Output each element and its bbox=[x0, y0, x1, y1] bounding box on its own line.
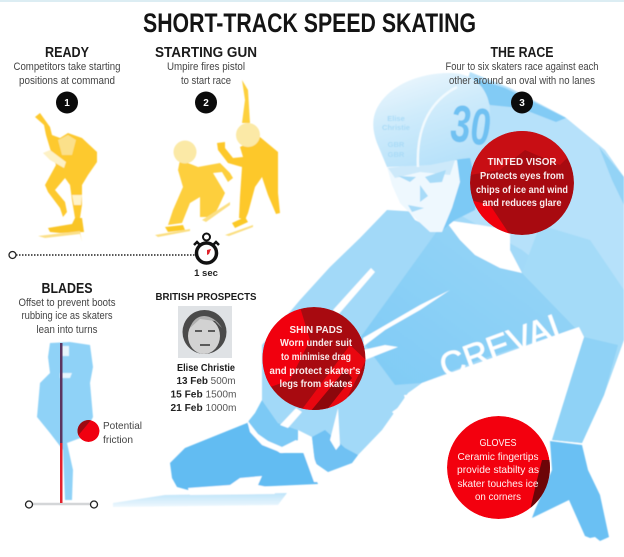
callout disc: shin pads bbox=[262, 307, 366, 412]
skater: helmet seam bbox=[418, 87, 457, 167]
icon: stopwatch bbox=[194, 234, 219, 263]
text: starting gun description: Umpire fires pistol bbox=[167, 61, 245, 73]
heading: starting gun: STARTING GUN bbox=[155, 45, 257, 61]
skater: helmet number: 30 bbox=[447, 95, 495, 158]
skater: glove bbox=[532, 441, 609, 541]
text: starting gun description bbox=[167, 61, 245, 87]
callout text: shin pads: to minimise drag bbox=[281, 351, 351, 363]
skater: helmet bbox=[373, 73, 490, 167]
text: blades description bbox=[18, 297, 116, 336]
skater: back stripe bbox=[473, 78, 566, 122]
skater: face bbox=[387, 160, 460, 232]
text: ready description: positions at command bbox=[19, 75, 115, 87]
text: starting gun description: to start race bbox=[181, 75, 231, 87]
callout disc: gloves bbox=[447, 416, 555, 519]
skater: body base bbox=[262, 210, 584, 472]
skater: helmet name: GBR bbox=[388, 140, 405, 149]
number badge 2: 2 bbox=[203, 98, 209, 109]
callout: gloves bbox=[447, 416, 555, 519]
skater: belly cutaway bbox=[412, 327, 584, 410]
callout text: gloves: provide stabilty as bbox=[457, 464, 539, 476]
skater: helmet name: GBR bbox=[388, 150, 405, 159]
callout text: gloves: Ceramic fingertips bbox=[458, 451, 538, 463]
timeline start marker bbox=[9, 252, 16, 258]
skater: helmet name: Elise bbox=[387, 114, 405, 123]
skater: neck shadow bbox=[440, 158, 478, 232]
label: potential friction: friction bbox=[103, 434, 133, 446]
heading: blades: BLADES bbox=[42, 281, 93, 297]
number badge 3: 3 bbox=[519, 98, 525, 109]
step 1: ready bbox=[14, 45, 120, 242]
blade base marker left bbox=[26, 501, 32, 508]
text: the race description: Four to six skaters race against each bbox=[446, 61, 598, 73]
skater: boot bbox=[170, 423, 318, 490]
skater: suit brand lettering: CREVAL bbox=[434, 304, 575, 387]
panel: blades bbox=[18, 281, 142, 508]
skater: visor and brow shading bbox=[388, 160, 455, 178]
icon: yellow upright skater bbox=[217, 80, 280, 236]
callout text: shin pads: SHIN PADS bbox=[290, 324, 342, 336]
callout text: gloves: on corners bbox=[475, 491, 521, 503]
text: ready description: Competitors take starting bbox=[14, 61, 120, 73]
number badge 2 bbox=[195, 92, 217, 114]
blade base line bbox=[29, 503, 94, 505]
callout text: gloves: skater touches ice bbox=[458, 478, 539, 490]
skater: white suit stripes bbox=[247, 210, 522, 482]
heading: the race: THE RACE bbox=[490, 45, 554, 61]
callout text: visor: and reduces glare bbox=[482, 197, 562, 209]
number badge 1 bbox=[56, 92, 78, 114]
skater: ice spray under boot bbox=[113, 493, 287, 507]
timeline with stopwatch bbox=[9, 234, 219, 279]
callout text: shin pads: and protect skater's bbox=[270, 365, 361, 377]
icon: skate seen from behind bbox=[37, 342, 93, 500]
skater: chest bbox=[360, 220, 584, 385]
friction marker bbox=[77, 420, 100, 442]
athlete event dates: 21 Feb 1000m bbox=[170, 402, 237, 414]
skater: back and far shoulder bbox=[440, 72, 624, 337]
step 3: the race bbox=[446, 45, 598, 114]
callout text: shin pads bbox=[270, 324, 361, 390]
athlete event dates: 15 Feb 1500m bbox=[170, 388, 237, 400]
callout text: visor: chips of ice and wind bbox=[476, 184, 568, 196]
label: one second: 1 sec bbox=[194, 268, 218, 279]
blade base marker right bbox=[90, 501, 98, 508]
skater: far-side shoulder stripe bbox=[599, 147, 624, 205]
text: blades description: Offset to prevent boots bbox=[18, 297, 116, 309]
heading: british prospects: BRITISH PROSPECTS bbox=[156, 291, 256, 303]
athlete name: Elise Christie bbox=[177, 362, 235, 374]
heading: ready: READY bbox=[45, 45, 89, 61]
step 2: starting gun bbox=[155, 45, 280, 237]
skater: boot strap and spray bbox=[188, 476, 275, 495]
skater: helmet name: Christie bbox=[382, 123, 410, 132]
label: potential friction: Potential bbox=[103, 420, 142, 432]
large skater illustration bbox=[113, 72, 624, 541]
callout disc: visor bbox=[470, 128, 575, 235]
callout text: gloves: GLOVES bbox=[480, 437, 516, 449]
callout text: shin pads: legs from skates bbox=[280, 378, 353, 390]
skater: helmet name bbox=[382, 114, 410, 159]
skater: ankle bbox=[247, 400, 298, 450]
callout text: shin pads: Worn under suit bbox=[280, 337, 352, 349]
text: the race description bbox=[446, 61, 598, 87]
text: ready description bbox=[14, 61, 120, 87]
panel: british prospects bbox=[156, 291, 256, 414]
athlete event dates bbox=[170, 375, 237, 414]
number badge 1: 1 bbox=[64, 98, 70, 109]
icon: yellow crouching skater bbox=[155, 140, 233, 237]
text: the race description: other around an oval with no lanes bbox=[449, 75, 595, 87]
number badge 3 bbox=[511, 92, 533, 114]
callout: shin pads bbox=[262, 307, 366, 412]
skater: right arm bbox=[522, 225, 624, 443]
label: potential friction bbox=[103, 420, 142, 446]
blade centre line bbox=[60, 343, 62, 503]
callout: tinted visor bbox=[470, 128, 575, 235]
text: blades description: lean into turns bbox=[36, 324, 98, 336]
skater: eye and lip shading bbox=[398, 170, 446, 212]
icon: yellow skater ready bbox=[35, 113, 97, 242]
timeline dotted line bbox=[16, 254, 196, 256]
title: SHORT-TRACK SPEED SKATING bbox=[143, 8, 476, 38]
athlete event dates: 13 Feb 500m bbox=[176, 375, 236, 387]
text: blades description: rubbing ice as skaters bbox=[22, 310, 113, 322]
skater: lower leg shadow bbox=[312, 430, 358, 472]
callout text: visor bbox=[476, 156, 568, 209]
callout text: visor: TINTED VISOR bbox=[488, 156, 557, 168]
portrait: Elise Christie bbox=[178, 306, 232, 358]
callout text: gloves bbox=[457, 437, 539, 503]
skater: arm lower shade bbox=[552, 337, 618, 443]
callout text: visor: Protects eyes from bbox=[480, 170, 564, 182]
